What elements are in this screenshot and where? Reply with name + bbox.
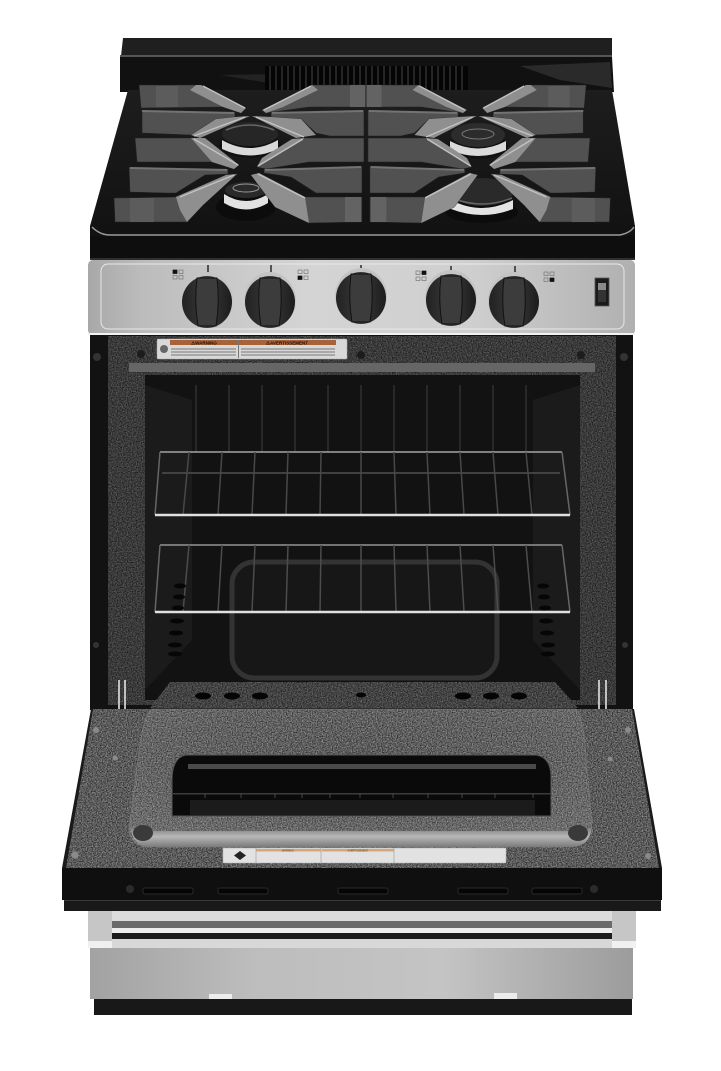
door label: AVERTISSEMENT (348, 850, 369, 852)
vent grille (265, 66, 468, 90)
side vents (168, 584, 555, 656)
burner: front left (216, 182, 276, 221)
burner: back right (448, 123, 508, 159)
burner: front right (446, 178, 518, 223)
oven floor pan (232, 562, 497, 678)
hinge: left (119, 680, 125, 723)
warning label: ⚠WARNING (191, 340, 217, 346)
burner indicators (173, 270, 554, 282)
backsplash (120, 38, 614, 92)
door label: WARNING (282, 850, 294, 852)
oven floor (150, 682, 578, 708)
door label (223, 848, 506, 863)
control panel (88, 260, 635, 335)
open oven door (62, 709, 662, 868)
warning label (157, 339, 347, 359)
warning label: ⚠AVERTISSEMENT (266, 340, 308, 346)
back wall ribs (196, 385, 526, 452)
speckled frame (108, 336, 616, 705)
storage drawer (90, 948, 633, 1002)
door window (172, 755, 551, 816)
door hinge rail (88, 911, 636, 948)
base (94, 999, 632, 1015)
control knobs (181, 265, 540, 328)
oven top trim (129, 363, 595, 372)
range body frame (90, 335, 633, 710)
door embossed panel (129, 709, 592, 847)
door front edge (62, 868, 662, 911)
rocker switch (595, 278, 609, 306)
oven cavity (145, 375, 580, 708)
cooktop (90, 85, 635, 260)
burner: back left (219, 122, 281, 158)
lower rack (155, 545, 570, 612)
hinge: right (599, 680, 606, 723)
upper rack (155, 452, 570, 515)
door vents (143, 888, 582, 894)
grate: left half (114, 85, 366, 223)
speckled door liner (66, 709, 659, 868)
grate: right half (366, 85, 610, 223)
